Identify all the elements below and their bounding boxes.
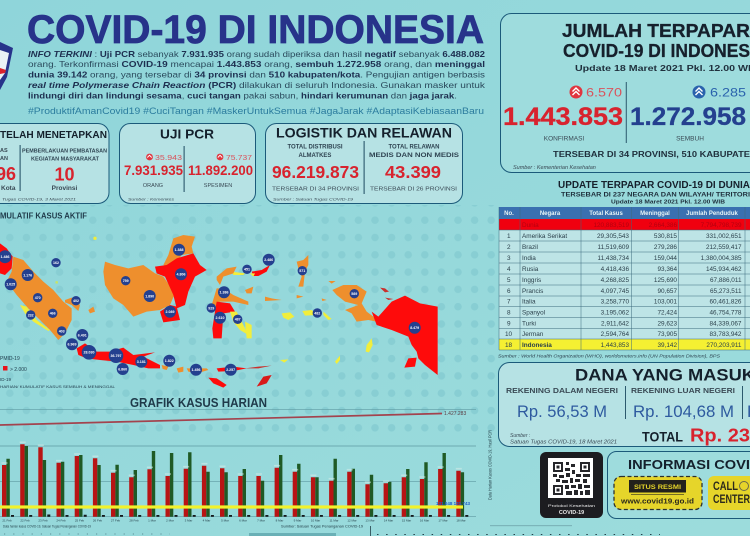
table rows: 103,001 — [654, 298, 677, 306]
table header: Meninggal — [640, 211, 670, 217]
source: Sumber : — [510, 433, 531, 439]
logo — [0, 42, 13, 90]
domestic amount: Rp. 56,53 M — [517, 402, 607, 421]
row: dunia: 7,794,798,739 — [701, 222, 742, 229]
legend label: > 2.000 — [10, 367, 27, 373]
table rows: 125,690 — [654, 277, 677, 284]
provinsi label: Provinsi — [52, 185, 78, 192]
info text block: lindungi diri dan lindungi sesama , cuci tangan pakai sabun, hindari kerumunan dan jaga jarak . — [28, 90, 457, 100]
table rows: 4 — [507, 266, 511, 273]
legend swatch — [3, 366, 8, 370]
total amount: Rp. 23 — [690, 426, 750, 446]
table header — [499, 207, 750, 219]
daily recovered: 6.285 — [710, 86, 746, 100]
label: SPESIMEN — [204, 183, 232, 189]
dotted background pattern — [0, 205, 500, 437]
recovered number: 1.272.958 — [630, 103, 746, 131]
column label: REKENING DALAM NEGERI — [506, 388, 618, 395]
case count markers: 1.386 — [220, 291, 228, 295]
table rows: 270,203,911 — [706, 342, 742, 349]
x axis labels: 23 Feb — [38, 518, 48, 522]
x axis labels: 2 Mar — [166, 518, 174, 522]
case count markers: 451 — [244, 268, 250, 272]
icon: up arrow blue — [692, 86, 706, 98]
table rows: India — [522, 255, 536, 262]
subheading: TERSEBAR DI 237 NEGARA DAN WILAYAH/ TERITORI — [561, 192, 750, 198]
qr caption: Protokol Kesehatan — [548, 503, 595, 508]
table rows: Rusia — [522, 266, 539, 273]
pcr orang number: 7.931.935 — [124, 163, 183, 178]
relawan heading: TOTAL RELAWAN — [388, 144, 440, 150]
x axis labels: 14 Mar — [384, 518, 393, 522]
info text block — [28, 49, 486, 100]
panel: uji pcr — [120, 124, 256, 204]
case count markers: 2.486 — [264, 258, 273, 262]
x axis labels: 11 Mar — [329, 518, 339, 522]
table rows: 84,339,067 — [710, 320, 742, 328]
clipped label: AS — [0, 148, 8, 154]
axis title: Data Harian Kasus COVID-19, Hasil PCR — [488, 429, 492, 500]
table rows: 11,519,609 — [597, 244, 629, 251]
red confirmed bars — [4, 444, 458, 517]
info text block: INFO TERKINI : Uji PCR sebanyak 7.931.935 orang sudah diperiksa dan hasil negatif sebanyak 6.488.082 — [28, 49, 485, 59]
column divider — [20, 145, 21, 191]
case count markers — [0, 244, 421, 376]
legend note: HARIAN/ KUMULATIF KASUS SEMBUH & MENINGGAL — [0, 384, 116, 389]
table header: Total Kasus — [589, 211, 623, 217]
eastern islands — [245, 255, 438, 387]
panel: dana yang masuk — [498, 362, 750, 446]
table rows: 331,002,651 — [706, 233, 742, 240]
table rows: 5 — [507, 277, 511, 284]
table rows: 4,268,825 — [601, 277, 629, 284]
call center badge — [708, 476, 750, 510]
table rows: 145,934,462 — [706, 266, 742, 273]
panel heading: TELAH MENETAPKAN — [0, 129, 107, 141]
case count markers: 6.969 — [68, 343, 76, 347]
info text block: orang. Terkonfirmasi COVID-19 mencapai 1.443.853 orang, sembuh 1.272.958 orang, dan meninggal — [28, 59, 485, 69]
table rows: Italia — [522, 298, 536, 306]
relawan heading: MEDIS DAN NON MEDIS — [369, 153, 459, 159]
map heading: MULATIF KASUS AKTIF — [0, 212, 87, 220]
table rows: 279,286 — [654, 244, 677, 251]
x axis labels: 26 Feb — [93, 518, 102, 522]
table rows: 3,258,770 — [601, 298, 629, 306]
case count markers: 1.388 — [174, 248, 184, 252]
case count markers: 571 — [299, 269, 305, 273]
case count markers: 6.491 — [78, 333, 87, 337]
qr caption: COVID-19 — [559, 510, 584, 516]
table rows: 3 — [507, 255, 511, 262]
daily spesimen: 75.737 — [226, 155, 252, 162]
table rows: 8 — [507, 310, 511, 316]
x axis labels: 9 Mar — [294, 518, 301, 522]
icon: up arrow — [217, 154, 223, 160]
x axis labels: 21 Feb — [2, 518, 12, 522]
x axis labels: 15 Mar — [402, 518, 411, 522]
table rows: 18 — [505, 342, 513, 349]
source: Tugas COVID-19, 3 Maret 2021 — [2, 196, 76, 202]
table rows: 2,911,642 — [601, 320, 629, 328]
case count markers: 1.025 — [6, 283, 15, 287]
table rows: Inggris — [522, 277, 541, 284]
column divider — [625, 82, 628, 143]
chart: daily cases — [0, 396, 492, 528]
table rows: 4,418,436 — [601, 266, 629, 273]
x axis labels: 16 Mar — [420, 518, 429, 522]
table rows: 39,142 — [657, 342, 677, 349]
distribution note: TERSEBAR DI 26 PROVINSI — [370, 186, 458, 192]
table rows: Spanyol — [522, 310, 545, 316]
qr finder centers — [556, 466, 586, 492]
source: Sumber : Kemenkes — [128, 196, 174, 202]
x axis labels: 6 Mar — [239, 518, 247, 522]
heading: JUMLAH TERPAPAR — [562, 20, 750, 41]
table rows: Jerman — [522, 331, 544, 338]
table rows: 29,305,543 — [597, 233, 629, 240]
case count markers: 3.181 — [137, 360, 146, 364]
table rows: 7 — [507, 298, 511, 306]
case count markers: 1.486 — [0, 255, 10, 259]
case count markers: 487 — [235, 318, 241, 322]
recovered label: SEMBUH — [676, 136, 704, 142]
table header: Negara — [540, 211, 561, 217]
case count markers: 403 — [59, 329, 65, 333]
table rows: 67,886,011 — [710, 277, 742, 284]
case count markers: 36.797 — [110, 354, 122, 358]
website badge: SITUS RESMI — [634, 484, 681, 491]
label: ORANG — [143, 183, 163, 189]
western islands — [0, 235, 248, 388]
map legend — [0, 356, 116, 389]
table source: Sumber : World Health Organization (WHO), worldometers.info (UN Population Division), BPS — [498, 354, 721, 358]
table rows: 3,195,062 — [601, 310, 629, 316]
row: indonesia highlight — [499, 339, 750, 350]
chart note: Sumber: Satuan Tugas Penanganan COVID-19 — [281, 524, 363, 528]
case count markers: 1.822 — [165, 359, 174, 363]
almatkes heading: TOTAL DISTRIBUSI — [287, 144, 343, 150]
panel: informasi covid — [608, 452, 750, 518]
case count markers: 1.456 — [192, 368, 200, 372]
case count markers: 589 — [351, 292, 357, 296]
panel heading: UJI PCR — [160, 126, 215, 142]
case count markers: 2.257 — [226, 368, 235, 372]
daily confirmed: 6.570 — [586, 86, 622, 100]
clipped label: AN — [0, 156, 8, 162]
column divider — [184, 146, 185, 192]
x axis labels: 25 Feb — [75, 518, 84, 522]
green recovered bars — [8, 446, 462, 517]
x axis labels: 3 Mar — [185, 518, 192, 522]
source: Sumber : Kementerian Kesehatan — [513, 165, 596, 171]
source: Sumber : Satuan Tugas COVID-19 — [273, 196, 354, 202]
table rows: 46,754,778 — [710, 310, 742, 316]
yellow average band — [0, 505, 463, 509]
bar value tags — [2, 442, 462, 482]
info text block: real time Polymerase Chain Reaction (PCR) dilakukan di seluruh Indonesia. Gunakan masker untuk — [28, 80, 486, 90]
table rows: 73,905 — [657, 331, 677, 338]
table rows: 90,657 — [657, 288, 677, 295]
icon: up arrow — [146, 154, 153, 160]
confirmed number: 1.443.853 — [503, 103, 623, 131]
column heading: KEGIATAN MASYARAKAT — [31, 156, 99, 162]
table rows: 159,044 — [654, 255, 677, 262]
panel: pembatasan — [0, 124, 109, 204]
row: dunia: 2,664,386 — [649, 222, 677, 229]
column heading: PEMBERLAKUAN PEMBATASAN — [22, 148, 107, 154]
x axis labels: 8 Mar — [276, 518, 283, 522]
table: world cases — [499, 207, 750, 350]
kota label: Kota — [1, 185, 16, 192]
table rows: 60,461,826 — [710, 298, 742, 306]
table rows: Prancis — [522, 288, 543, 295]
chart source: Data harian kasus COVID-19, Satuan Tugas Penanganan COVID-19 — [3, 524, 91, 528]
row: dunia: 120,883,519 — [593, 222, 629, 229]
table header: No. — [504, 211, 514, 217]
provinsi count: 10 — [54, 164, 75, 184]
update date: Update 18 Maret 2021 Pkl. 12.00 WIB — [611, 200, 725, 206]
case count markers: 2.610 — [216, 316, 224, 320]
world update heading — [558, 180, 750, 206]
column divider — [364, 141, 365, 194]
heading: INFORMASI COVI — [628, 458, 750, 472]
info text block: dunia 39.142 orang, yang tersebar di 34 provinsi dan 510 kabupaten/kota . Pengujian antigen berbasis — [28, 70, 485, 80]
almatkes number: 96.219.873 — [272, 162, 359, 182]
average label: 131.048 131.743 — [436, 501, 470, 506]
table rows: Indonesia — [522, 342, 552, 349]
almatkes heading: ALMATKES — [299, 153, 331, 159]
icon: up arrow red — [570, 86, 582, 98]
relawan number: 43.399 — [385, 162, 441, 182]
case count markers: 6.860 — [118, 367, 127, 371]
qr code — [553, 462, 590, 495]
table rows: 530,815 — [654, 233, 677, 240]
table rows: 4,097,745 — [601, 288, 629, 295]
table rows: 65,273,511 — [710, 288, 742, 295]
pcr spesimen number: 11.892.200 — [188, 163, 253, 178]
panel heading: LOGISTIK DAN RELAWAN — [276, 124, 452, 140]
case count markers: 8.479 — [410, 326, 419, 330]
case count markers: 402 — [73, 299, 79, 303]
website badge: www.covid19.go.id — [620, 496, 694, 506]
case count markers: 759 — [123, 279, 129, 283]
confirmed label: KONFIRMASI — [544, 136, 584, 142]
case count markers: 466 — [50, 312, 56, 316]
table rows: 2 — [507, 244, 511, 251]
x axis labels: 28 Feb — [129, 518, 139, 522]
table rows: 83,783,942 — [710, 331, 742, 338]
x axis labels: 10 Mar — [311, 518, 320, 522]
distribution note: TERSEBAR DI 34 PROVINSI — [272, 186, 360, 192]
case count markers: 2.089 — [166, 310, 174, 314]
black death bars — [12, 514, 467, 517]
update date: Update 18 Maret 2021 Pkl. 12.00 WI — [575, 64, 750, 73]
x axis labels: 18 Mar — [456, 518, 466, 522]
x axis labels: 24 Feb — [56, 518, 66, 522]
table rows: 2,594,764 — [601, 331, 629, 338]
bottom strip — [4, 526, 660, 536]
table grid — [499, 207, 750, 350]
total label: TOTAL — [642, 428, 683, 444]
case count markers: 28.030 — [84, 351, 94, 355]
x axis labels: 17 Mar — [438, 518, 448, 522]
x axis labels: 27 Feb — [111, 518, 120, 522]
daily orang: 35.943 — [155, 155, 182, 162]
qr finder holes — [555, 464, 588, 493]
table rows: Amerika Serikat — [522, 233, 567, 240]
table rows: 1,380,004,385 — [701, 255, 742, 262]
cumulative line — [0, 414, 442, 425]
x axis labels: 1 Mar — [148, 518, 156, 522]
x axis labels: 7 Mar — [257, 518, 265, 522]
heading: DANA YANG MASUK — [575, 366, 750, 384]
spread note: TERSEBAR DI 34 PROVINSI, 510 KABUPATE — [553, 150, 750, 159]
legend note: ID-19 — [0, 377, 12, 382]
column divider — [741, 386, 744, 419]
x axis labels: 22 Feb — [20, 518, 30, 522]
hashtags: #ProduktifAmanCovid19 #CuciTangan #MaskerUntukSemua #JagaJarak #AdaptasiKebiasaanBaru — [28, 106, 484, 116]
table rows: 93,364 — [657, 266, 677, 273]
call center badge: CALL — [713, 479, 738, 493]
table rows: 11,438,734 — [597, 255, 629, 262]
table rows: Brazil — [522, 244, 538, 251]
column divider — [624, 386, 627, 419]
case count markers: 470 — [35, 296, 41, 300]
table rows: 72,424 — [657, 310, 677, 316]
table rows: 29,623 — [657, 320, 677, 328]
table header: Jumlah Penduduk — [686, 211, 738, 217]
table rows: 10 — [505, 331, 513, 338]
table rows: 9 — [507, 320, 511, 328]
panel: logistik dan relawan — [266, 124, 462, 204]
case count markers: 232 — [28, 313, 34, 317]
source: Satuan Tugas COVID-19, 18 Maret 2021 — [510, 440, 617, 446]
map legend: PMID-19 — [0, 356, 20, 362]
world update heading: UPDATE TERPAPAR COVID-19 DI DUNIA — [558, 180, 750, 191]
case count markers: 482 — [314, 311, 320, 315]
table rows: 6 — [507, 288, 511, 295]
column label: REKENING LUAR NEGERI — [631, 388, 735, 395]
x axis labels: 4 Mar — [203, 518, 210, 522]
case count markers: 929 — [208, 306, 214, 310]
map of indonesia — [0, 235, 438, 388]
case count markers: 162 — [53, 261, 59, 265]
panel: jumlah terpapar — [500, 14, 750, 172]
x axis labels — [2, 518, 466, 522]
table rows: 1 — [507, 233, 511, 240]
title: COVID-19 DI INDONESIA — [27, 8, 484, 52]
case count markers: 1.176 — [23, 273, 32, 277]
case count markers: 4.806 — [176, 273, 186, 277]
table rows: 212,559,417 — [706, 244, 742, 251]
row: dunia: Dunia — [522, 222, 539, 229]
x axis labels: 13 Mar — [365, 518, 375, 522]
table rows: 1,443,853 — [601, 342, 629, 349]
x axis labels: 12 Mar — [347, 518, 357, 522]
table rows: Turki — [522, 320, 536, 328]
table rows — [505, 233, 742, 349]
cumulative label: 1.427.283 — [444, 411, 466, 417]
foreign amount: Rp. 104,68 M — [633, 402, 734, 421]
row: dunia — [499, 219, 750, 230]
chart title: GRAFIK KASUS HARIAN — [130, 396, 267, 410]
x axis labels: 5 Mar — [221, 518, 229, 522]
qr card — [540, 452, 603, 518]
case count markers: 1.890 — [145, 294, 154, 298]
website badge — [614, 476, 702, 510]
